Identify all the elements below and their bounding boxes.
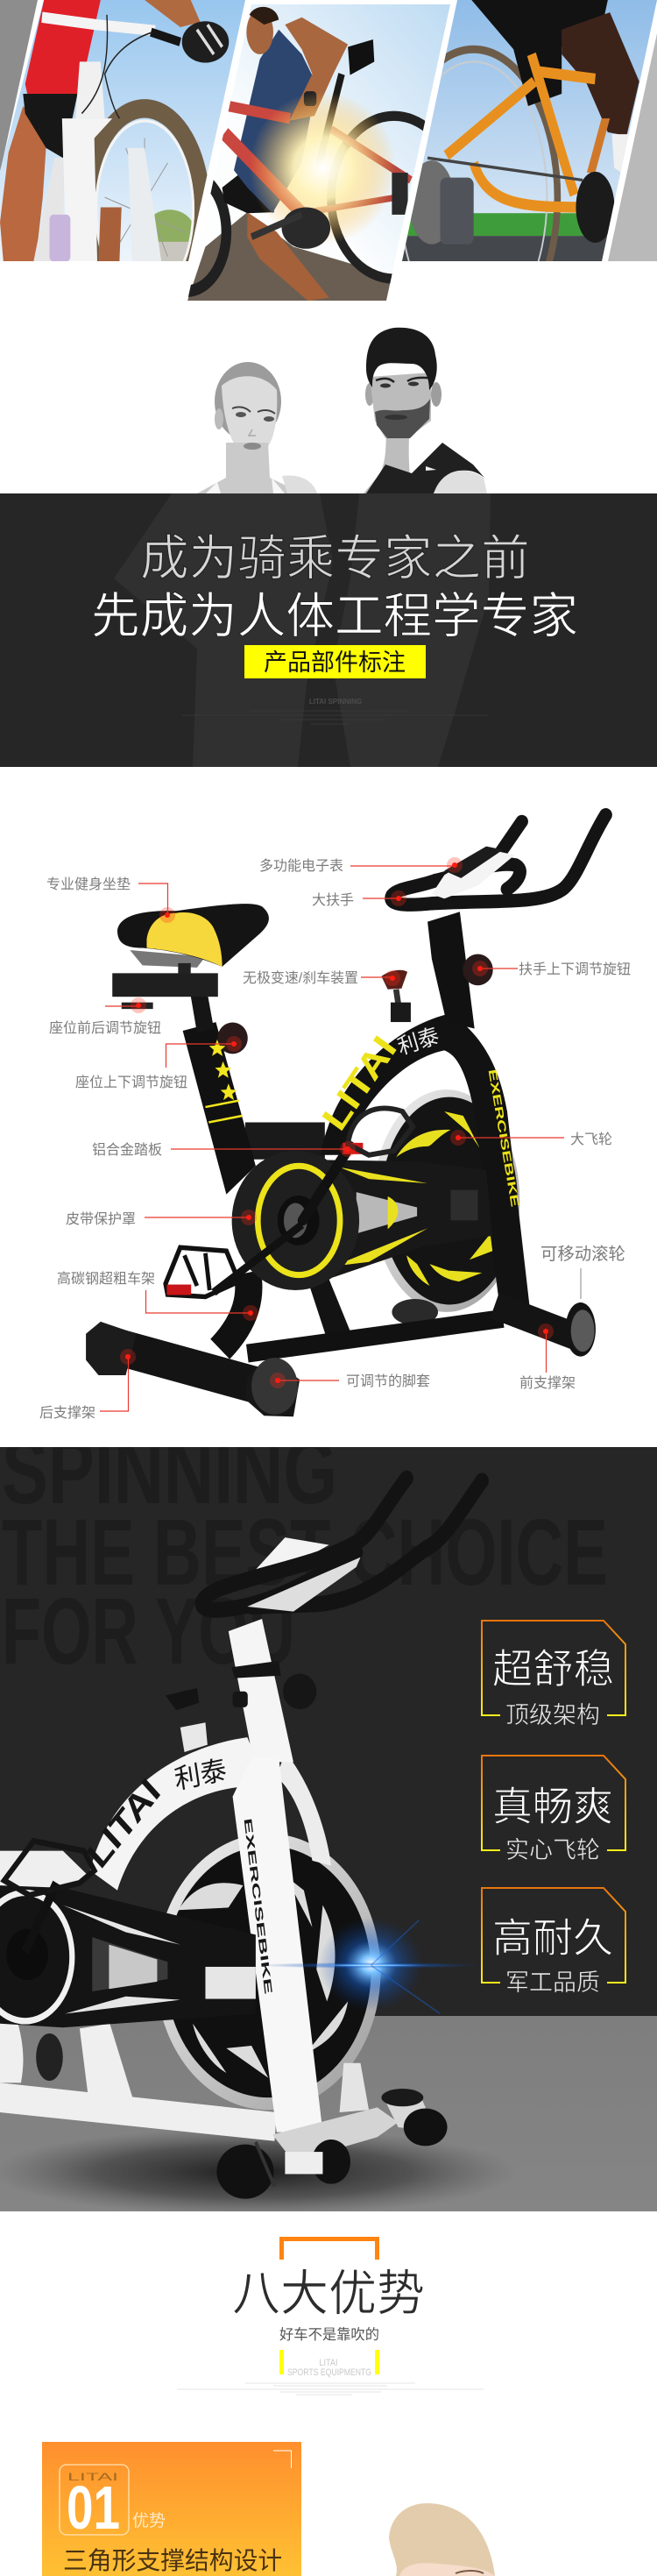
- brand name: 利泰: [395, 1024, 442, 1060]
- watermark line 1: SPINNING: [2, 1417, 337, 1523]
- white bike illustration: [0, 1479, 484, 2199]
- EXERCISEBIKE lettering: EXERCISEBIKE: [486, 1068, 522, 1208]
- heading: 八大优势: [232, 2266, 425, 2321]
- english caption line 1: LITAI: [319, 2358, 338, 2368]
- photo: front wheel and rider: [0, 0, 245, 261]
- callout: adjustable foot cover: 可调节的脚套: [346, 1373, 430, 1389]
- callout: pedal: 铝合金踏板: [92, 1142, 162, 1158]
- callout: seat height knob: [75, 1036, 242, 1090]
- number badge: LITAI: [67, 2471, 118, 2483]
- dark wall: [0, 1447, 657, 2016]
- callout: seat height knob: 座位上下调节旋钮: [75, 1075, 187, 1090]
- orange bracket: [282, 2239, 377, 2260]
- watermark line 3: FOR YOU: [2, 1578, 295, 1684]
- crank arm and belt cover: [214, 1108, 492, 1293]
- dark band background: [0, 493, 657, 767]
- number badge: 01: [67, 2473, 120, 2542]
- photo: orange bike frame closeup: [402, 0, 657, 261]
- brand name: 利泰: [173, 1756, 229, 1796]
- floor shadow: [16, 2132, 492, 2211]
- handlebars: [166, 1479, 482, 1752]
- LITAI logo on frame: LITAI: [81, 1771, 167, 1877]
- callout: steel frame: [57, 1271, 258, 1321]
- callout: seat fore-aft knob: 座位前后调节旋钮: [49, 1020, 161, 1036]
- badge: durable: 军工品质: [505, 1969, 600, 1996]
- callout: seat fore-aft knob: [49, 997, 161, 1036]
- callout: handlebar: [312, 891, 406, 908]
- callout: flywheel: [450, 1130, 612, 1147]
- badge: smooth: 真畅爽: [492, 1784, 613, 1829]
- ghosted body silhouettes: [114, 493, 491, 767]
- frame: [86, 912, 596, 1416]
- right gray wedge: [608, 33, 657, 261]
- callout: adjustable foot cover: [270, 1373, 430, 1389]
- portrait: woman: [197, 362, 317, 493]
- panel: white bike with feature badges: [0, 1417, 657, 2216]
- left gray wedge: [0, 0, 38, 173]
- panel: advantage 01 card: [42, 2442, 495, 2576]
- bike illustration: [86, 815, 605, 1416]
- callout: handlebar: 大扶手: [312, 892, 354, 908]
- badge: smooth: 实心飞轮: [505, 1837, 600, 1863]
- callout: rear support: 后支撑架: [39, 1405, 95, 1421]
- english caption line 2: SPORTS EQUIPMENTG: [287, 2367, 371, 2378]
- callout: pedal: [92, 1141, 356, 1158]
- callout: rear support: [39, 1349, 136, 1421]
- panel: labelled black and yellow spin bike: [39, 815, 631, 1421]
- yellow tag: [244, 645, 426, 678]
- portrait: man: [364, 328, 487, 493]
- title line 2: 先成为人体工程学专家: [91, 589, 578, 643]
- corner mark: [273, 2451, 291, 2468]
- badge: durable: 高耐久: [492, 1915, 613, 1961]
- panel: cycling photo collage: [0, 0, 657, 301]
- subheading: 好车不是靠吹的: [279, 2327, 379, 2343]
- badge: super comfort: 顶级架构: [505, 1702, 600, 1728]
- badge: super comfort: [482, 1621, 625, 1728]
- flywheel: [156, 1834, 380, 2110]
- crank arm: [0, 1841, 256, 2027]
- pedal: [166, 1247, 239, 1296]
- panel: eight advantages heading: [177, 2239, 484, 2395]
- callout: saddle: [46, 876, 175, 923]
- handlebars and console: [381, 815, 605, 1022]
- badge: super comfort: 超舒稳: [492, 1646, 614, 1692]
- gray floor: [0, 2016, 657, 2211]
- callout: steel frame: 高碳钢超粗车架: [57, 1271, 155, 1287]
- callout: rollers: 可移动滚轮: [540, 1245, 625, 1264]
- faint caption: LITAI SPINNING: [309, 698, 362, 706]
- callout: flywheel: 大飞轮: [570, 1132, 612, 1147]
- EXERCISEBIKE lettering: EXERCISEBIKE: [242, 1817, 274, 1995]
- badge: durable: [482, 1888, 625, 1996]
- callout: belt guard: [66, 1210, 257, 1227]
- callout: rollers: [540, 1245, 625, 1299]
- callout: handlebar knob: 扶手上下调节旋钮: [519, 962, 631, 977]
- callout: handlebar knob: [472, 961, 631, 977]
- callout: brake: [243, 970, 400, 986]
- callout: console: 多功能电子表: [259, 858, 343, 874]
- callout: front support: [519, 1323, 576, 1391]
- label: 优势: [132, 2511, 166, 2530]
- faint description lines: [177, 2383, 484, 2395]
- orange card: [42, 2442, 301, 2576]
- yellow bars: [282, 2350, 377, 2374]
- blue lens flare: [258, 1918, 484, 2013]
- seat post and saddle: [112, 904, 269, 1122]
- faint caption: [182, 698, 489, 724]
- yellow tag: 产品部件标注: [264, 649, 406, 676]
- rollers: [216, 2089, 448, 2199]
- callout: belt guard: 皮带保护罩: [66, 1211, 136, 1227]
- photo: rider carrying bike with sun flare: [187, 4, 450, 301]
- panel: man and woman portraits over dark band: [0, 328, 657, 767]
- callout: console: [259, 857, 463, 874]
- badge: smooth: [482, 1756, 625, 1863]
- card title: 三角形支撑结构设计: [63, 2547, 282, 2574]
- title line 1: 成为骑乘专家之前: [140, 531, 530, 585]
- callout: brake: 无极变速/刹车装置: [243, 970, 358, 986]
- frame: [0, 1619, 436, 2161]
- callout: saddle: 专业健身坐垫: [46, 876, 131, 892]
- LITAI logo on frame: LITAI: [314, 1028, 405, 1138]
- flywheel: [373, 1089, 519, 1325]
- woman head: [389, 2503, 495, 2576]
- callout: front support: 前支撑架: [519, 1375, 576, 1391]
